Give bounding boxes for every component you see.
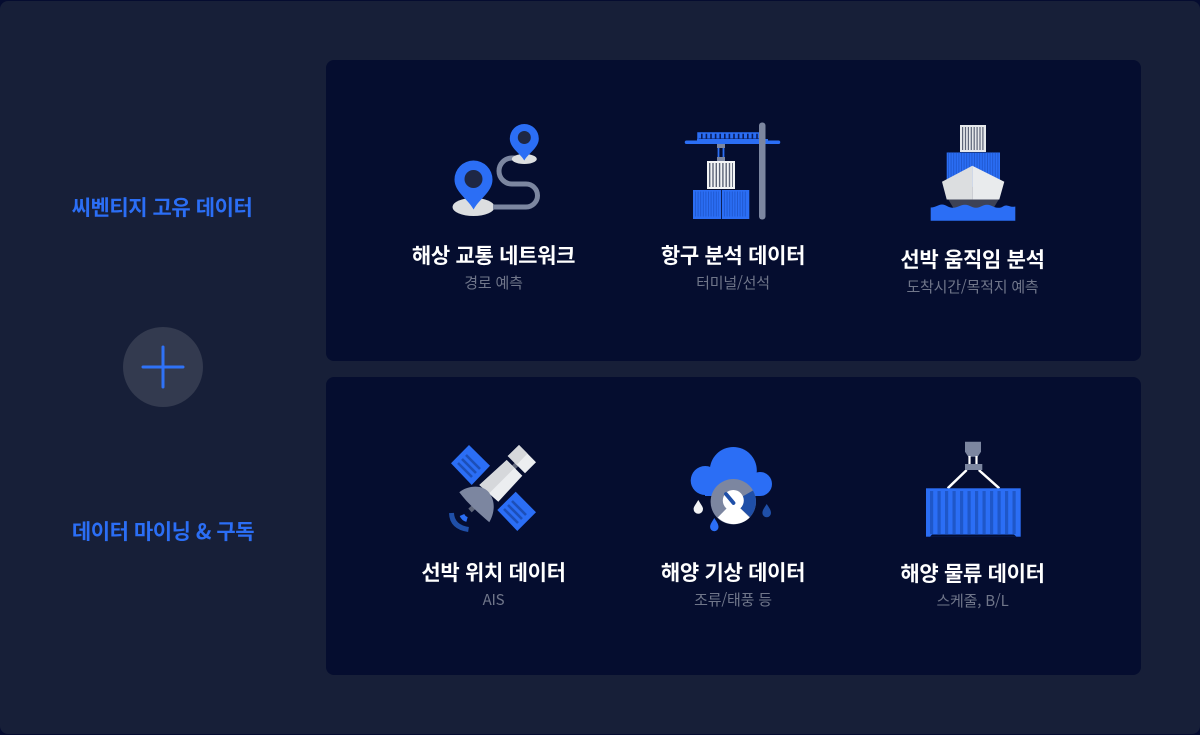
title: 선박 움직임 분석 <box>900 244 1045 274</box>
subtitle: 조류/태풍 등 <box>694 589 772 610</box>
icon: cloud with gauge <box>690 447 772 532</box>
title: 선박 위치 데이터 <box>421 557 566 587</box>
icon: satellite <box>449 445 536 532</box>
title: 해상 교통 네트워크 <box>412 240 575 270</box>
icon: route pins <box>452 124 540 216</box>
icon: hanging container <box>926 442 1021 537</box>
icon: ship <box>930 125 1016 221</box>
subtitle: 경로 예측 <box>464 272 523 293</box>
panel: top data group <box>326 60 1141 361</box>
subtitle: 터미널/선석 <box>696 272 770 293</box>
heading: proprietary data: 씨벤티지 고유 데이터 <box>72 192 252 222</box>
title: 해양 기상 데이터 <box>661 557 805 587</box>
title: 해양 물류 데이터 <box>900 558 1045 588</box>
heading: data mining and subscription: 데이터 마이닝 & 구독 <box>72 516 254 546</box>
icon: port crane <box>684 122 780 220</box>
subtitle: 도착시간/목적지 예측 <box>906 276 1039 297</box>
panel: bottom data group <box>326 377 1141 675</box>
subtitle: 스케줄, B/L <box>936 590 1009 611</box>
title: 항구 분석 데이터 <box>661 240 805 270</box>
icon: plus <box>123 327 203 407</box>
subtitle: AIS <box>483 589 504 610</box>
